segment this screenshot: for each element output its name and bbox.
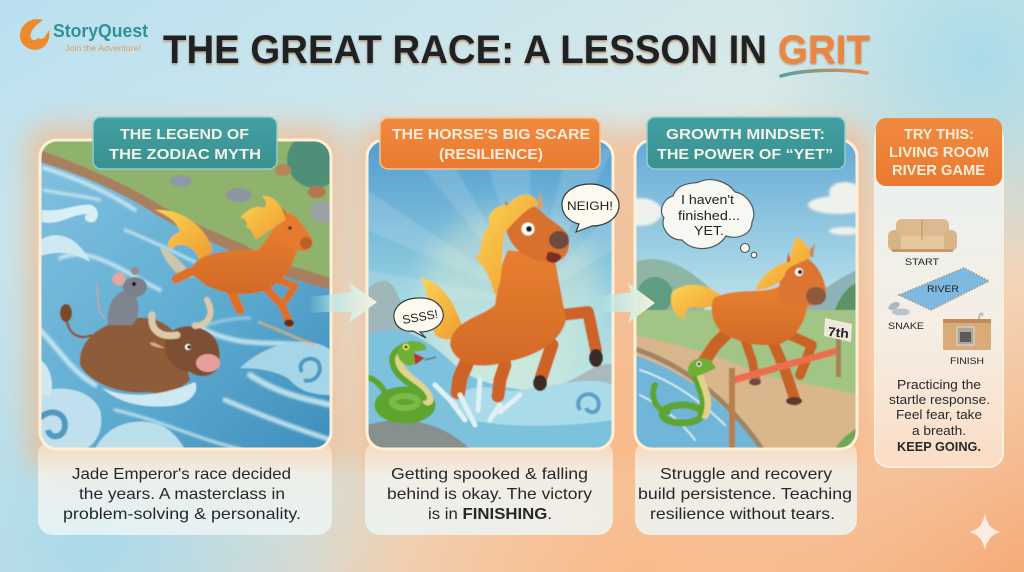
tab: the legend of the zodiac myth (93, 117, 277, 169)
caption card 3: build persistence. Teaching (638, 486, 852, 503)
icon: river rug (899, 268, 989, 310)
caption card 1: the years. A masterclass in (79, 486, 285, 503)
caption card 1: problem-solving & personality. (63, 506, 301, 523)
caption card 1: Jade Emperor's race decided (72, 466, 291, 483)
title: GRIT (778, 28, 870, 72)
illustration: horse passing the finish with the snake (636, 142, 856, 448)
snake 3 (653, 368, 707, 423)
sign: 7th (824, 318, 852, 342)
card background (875, 125, 1003, 467)
label: snake: SNAKE (888, 321, 924, 332)
rat (96, 267, 147, 325)
tab: living room river game (876, 118, 1002, 186)
thought bubble: YET. (694, 224, 724, 238)
title underline swoosh (781, 70, 867, 76)
thought bubble: I haven't (681, 193, 735, 207)
caption card 3: resilience without tears. (650, 506, 835, 523)
caption card 3: Struggle and recovery (660, 466, 832, 483)
tab: growth mindset: GROWTH MINDSET: (666, 126, 825, 143)
arrow: panel 1 to panel 2 (308, 282, 377, 323)
illustration: ox, rat and horse crossing the river (40, 132, 343, 449)
tab: living room river game: TRY THIS: (904, 127, 974, 143)
tab: growth mindset (647, 117, 845, 169)
label: start: START (905, 257, 939, 268)
horse 2 (420, 193, 603, 425)
splash (435, 380, 520, 425)
sign: 7th: 7th (827, 324, 850, 341)
logo (20, 19, 148, 53)
panel: growth mindset (618, 117, 868, 535)
description: Feel fear, take (896, 408, 982, 422)
label: finish: FINISH (950, 356, 984, 367)
illustration: startled horse and snake (367, 140, 613, 449)
panel frame 3 (635, 140, 857, 449)
splash behind horse (160, 248, 195, 277)
title: THE GREAT RACE: A LESSON IN (163, 28, 767, 72)
tab: the horse's big scare (380, 118, 600, 169)
panel: try this (875, 118, 1003, 467)
description: startle response. (889, 393, 990, 407)
description: a breath. (912, 424, 966, 438)
caption card 3 (635, 440, 857, 535)
horse 3 (671, 238, 826, 405)
tagline: Join the Adventure! (65, 44, 141, 53)
thought bubble: finished... (678, 209, 740, 223)
icon: kitchen stove (943, 313, 991, 350)
arrow: panel 2 to panel 3 (590, 282, 655, 323)
brand name: StoryQuest (53, 20, 148, 41)
tab: the horse's big scare: (RESILIENCE) (439, 146, 543, 163)
speech bubble: SSSS: SSSS! (401, 307, 439, 327)
caption card 2: Getting spooked & falling (391, 466, 588, 483)
icon: river rug: RIVER (927, 284, 959, 295)
icon: sofa (888, 219, 957, 252)
tab: living room river game: RIVER GAME (892, 163, 985, 179)
speech bubble: NEIGH (562, 184, 619, 232)
panel frame 1 (40, 140, 331, 449)
tab: living room river game: LIVING ROOM (889, 145, 989, 161)
snake 2 (370, 344, 431, 419)
panel: the horse's big scare (365, 118, 619, 535)
finish ribbon (731, 347, 838, 384)
caption card 1 (38, 440, 332, 535)
waves at ox base (102, 382, 196, 406)
speech bubble: SSSS (394, 298, 443, 338)
panel glows (28, 126, 869, 471)
icon: sparkle (969, 513, 1001, 550)
tab: the legend of the zodiac myth: THE LEGEND OF (120, 126, 249, 143)
description: KEEP GOING. (897, 440, 981, 454)
icon: logo crescent (20, 19, 49, 50)
thought bubble (662, 180, 757, 258)
description: Practicing the (897, 378, 981, 392)
caption card 2 (365, 440, 613, 535)
description (889, 378, 990, 454)
water highlights (40, 168, 331, 449)
panel frame 2 (367, 140, 613, 449)
tab: the legend of the zodiac myth: THE ZODIAC MYTH (109, 146, 261, 163)
caption card 2: behind is okay. The victory (387, 486, 592, 503)
tab: the horse's big scare: THE HORSE'S BIG SCARE (392, 126, 590, 143)
ox (60, 300, 220, 394)
caption card 2: is in FINISHING. (428, 506, 552, 523)
speech bubble: NEIGH: NEIGH! (567, 199, 613, 213)
horse 1 (155, 196, 313, 326)
tab: growth mindset: THE POWER OF “YET” (657, 146, 833, 163)
panel: legend of the zodiac myth (38, 117, 343, 535)
icon: socks (887, 300, 910, 316)
wave swirls (42, 205, 98, 223)
